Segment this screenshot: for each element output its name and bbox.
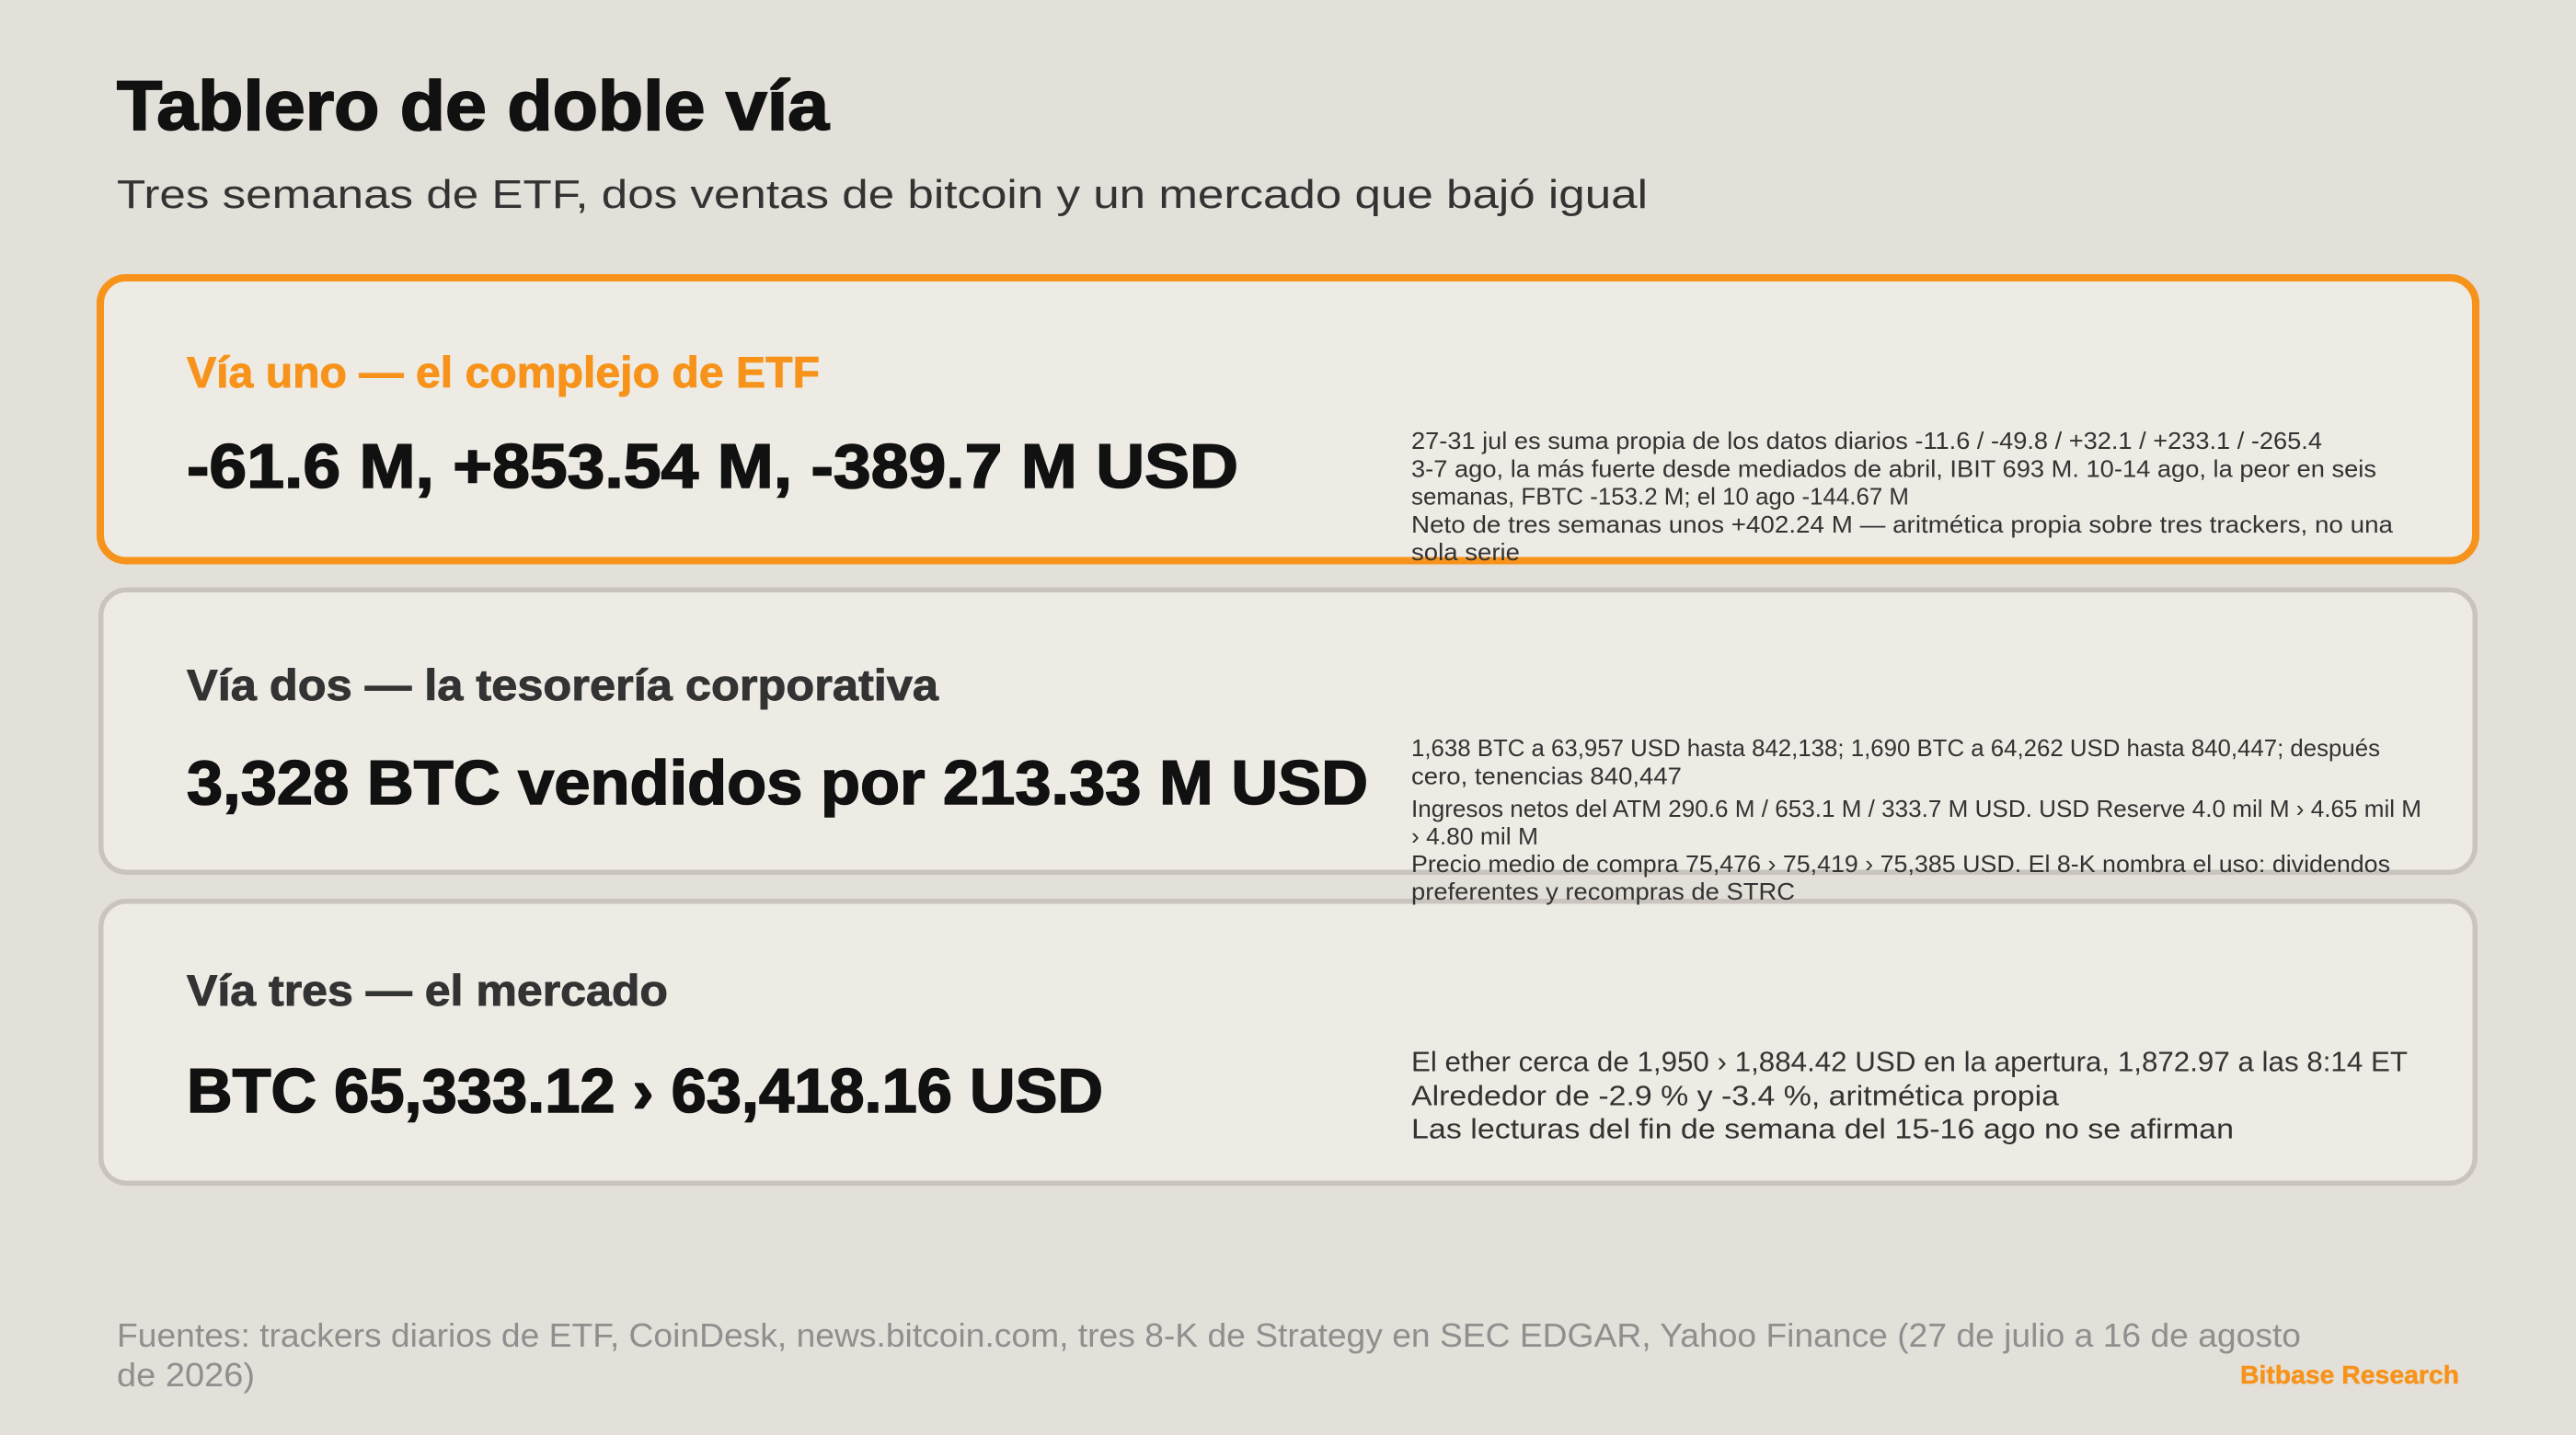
notes: detalle tesorería: cero, tenencias 840,447 [1411, 762, 1682, 789]
notes: detalle mercado: Las lecturas del fin de semana del 15-16 ago no se afirman [1411, 1113, 2234, 1144]
heading: vía tres: Vía tres — el mercado [187, 966, 668, 1015]
notes: detalle tesorería: preferentes y recompras de STRC [1411, 878, 1795, 905]
notes: detalle mercado: El ether cerca de 1,950 › 1,884.42 USD en la apertura, 1,872.97 a las 8:14 ET [1411, 1045, 2408, 1078]
notes: detalle tesorería: › 4.80 mil M [1411, 822, 1538, 850]
key figure: flujos ETF: -61.6 M, +853.54 M, -389.7 M USD [187, 431, 1238, 501]
panel: vía uno, el complejo de ETF [100, 278, 2476, 566]
footer: fuentes [117, 1316, 2301, 1394]
notes: detalle ETF: sola serie [1411, 538, 1520, 566]
key figure: precio BTC: BTC 65,333.12 › 63,418.16 USD [187, 1056, 1103, 1126]
panel: vía tres, el mercado [101, 901, 2475, 1183]
notes: detalle mercado [1411, 1045, 2408, 1144]
notes: detalle mercado: Alrededor de -2.9 % y -3.4 %, aritmética propia [1411, 1080, 2060, 1111]
notes: detalle tesorería: 1,638 BTC a 63,957 USD hasta 842,138; 1,690 BTC a 64,262 USD hasta 840,447; después [1411, 734, 2380, 762]
notes: detalle tesorería [1411, 734, 2421, 905]
notes: detalle ETF: 3-7 ago, la más fuerte desde mediados de abril, IBIT 693 M. 10-14 ago, la peor en seis [1411, 454, 2376, 482]
footer: fuentes: Fuentes: trackers diarios de ETF, CoinDesk, news.bitcoin.com, tres 8-K de Strategy en SEC EDGAR, Yahoo Finance (27 de julio a 16 de agosto [117, 1316, 2301, 1354]
footer: fuentes: de 2026) [117, 1356, 255, 1394]
notes: detalle ETF [1411, 427, 2394, 566]
notes: detalle ETF: 27-31 jul es suma propia de los datos diarios -11.6 / -49.8 / +32.1 / +233.1 / -265.4 [1411, 427, 2322, 454]
brand: Bitbase Research: Bitbase Research [2240, 1360, 2459, 1389]
title: Tablero de doble vía [117, 67, 830, 145]
notes: detalle ETF: semanas, FBTC -153.2 M; el 10 ago -144.67 M [1411, 482, 1909, 510]
notes: detalle tesorería: Ingresos netos del ATM 290.6 M / 653.1 M / 333.7 M USD. USD Reserve 4.0 mil M › 4.65 mil M [1411, 795, 2421, 822]
notes: detalle tesorería: Precio medio de compra 75,476 › 75,419 › 75,385 USD. El 8-K nombra el uso: dividendos [1411, 850, 2390, 878]
key figure: BTC vendidos: 3,328 BTC vendidos por 213.33 M USD [187, 748, 1368, 818]
heading: vía uno: Vía uno — el complejo de ETF [187, 348, 820, 396]
heading: vía dos: Vía dos — la tesorería corporativa [187, 660, 939, 709]
notes: detalle ETF: Neto de tres semanas unos +402.24 M — aritmética propia sobre tres trackers, no una [1411, 511, 2394, 538]
panel: vía dos, la tesorería corporativa [101, 590, 2475, 905]
subtitle: Tres semanas de ETF, dos ventas de bitcoin y un mercado que bajó igual [117, 172, 1648, 217]
